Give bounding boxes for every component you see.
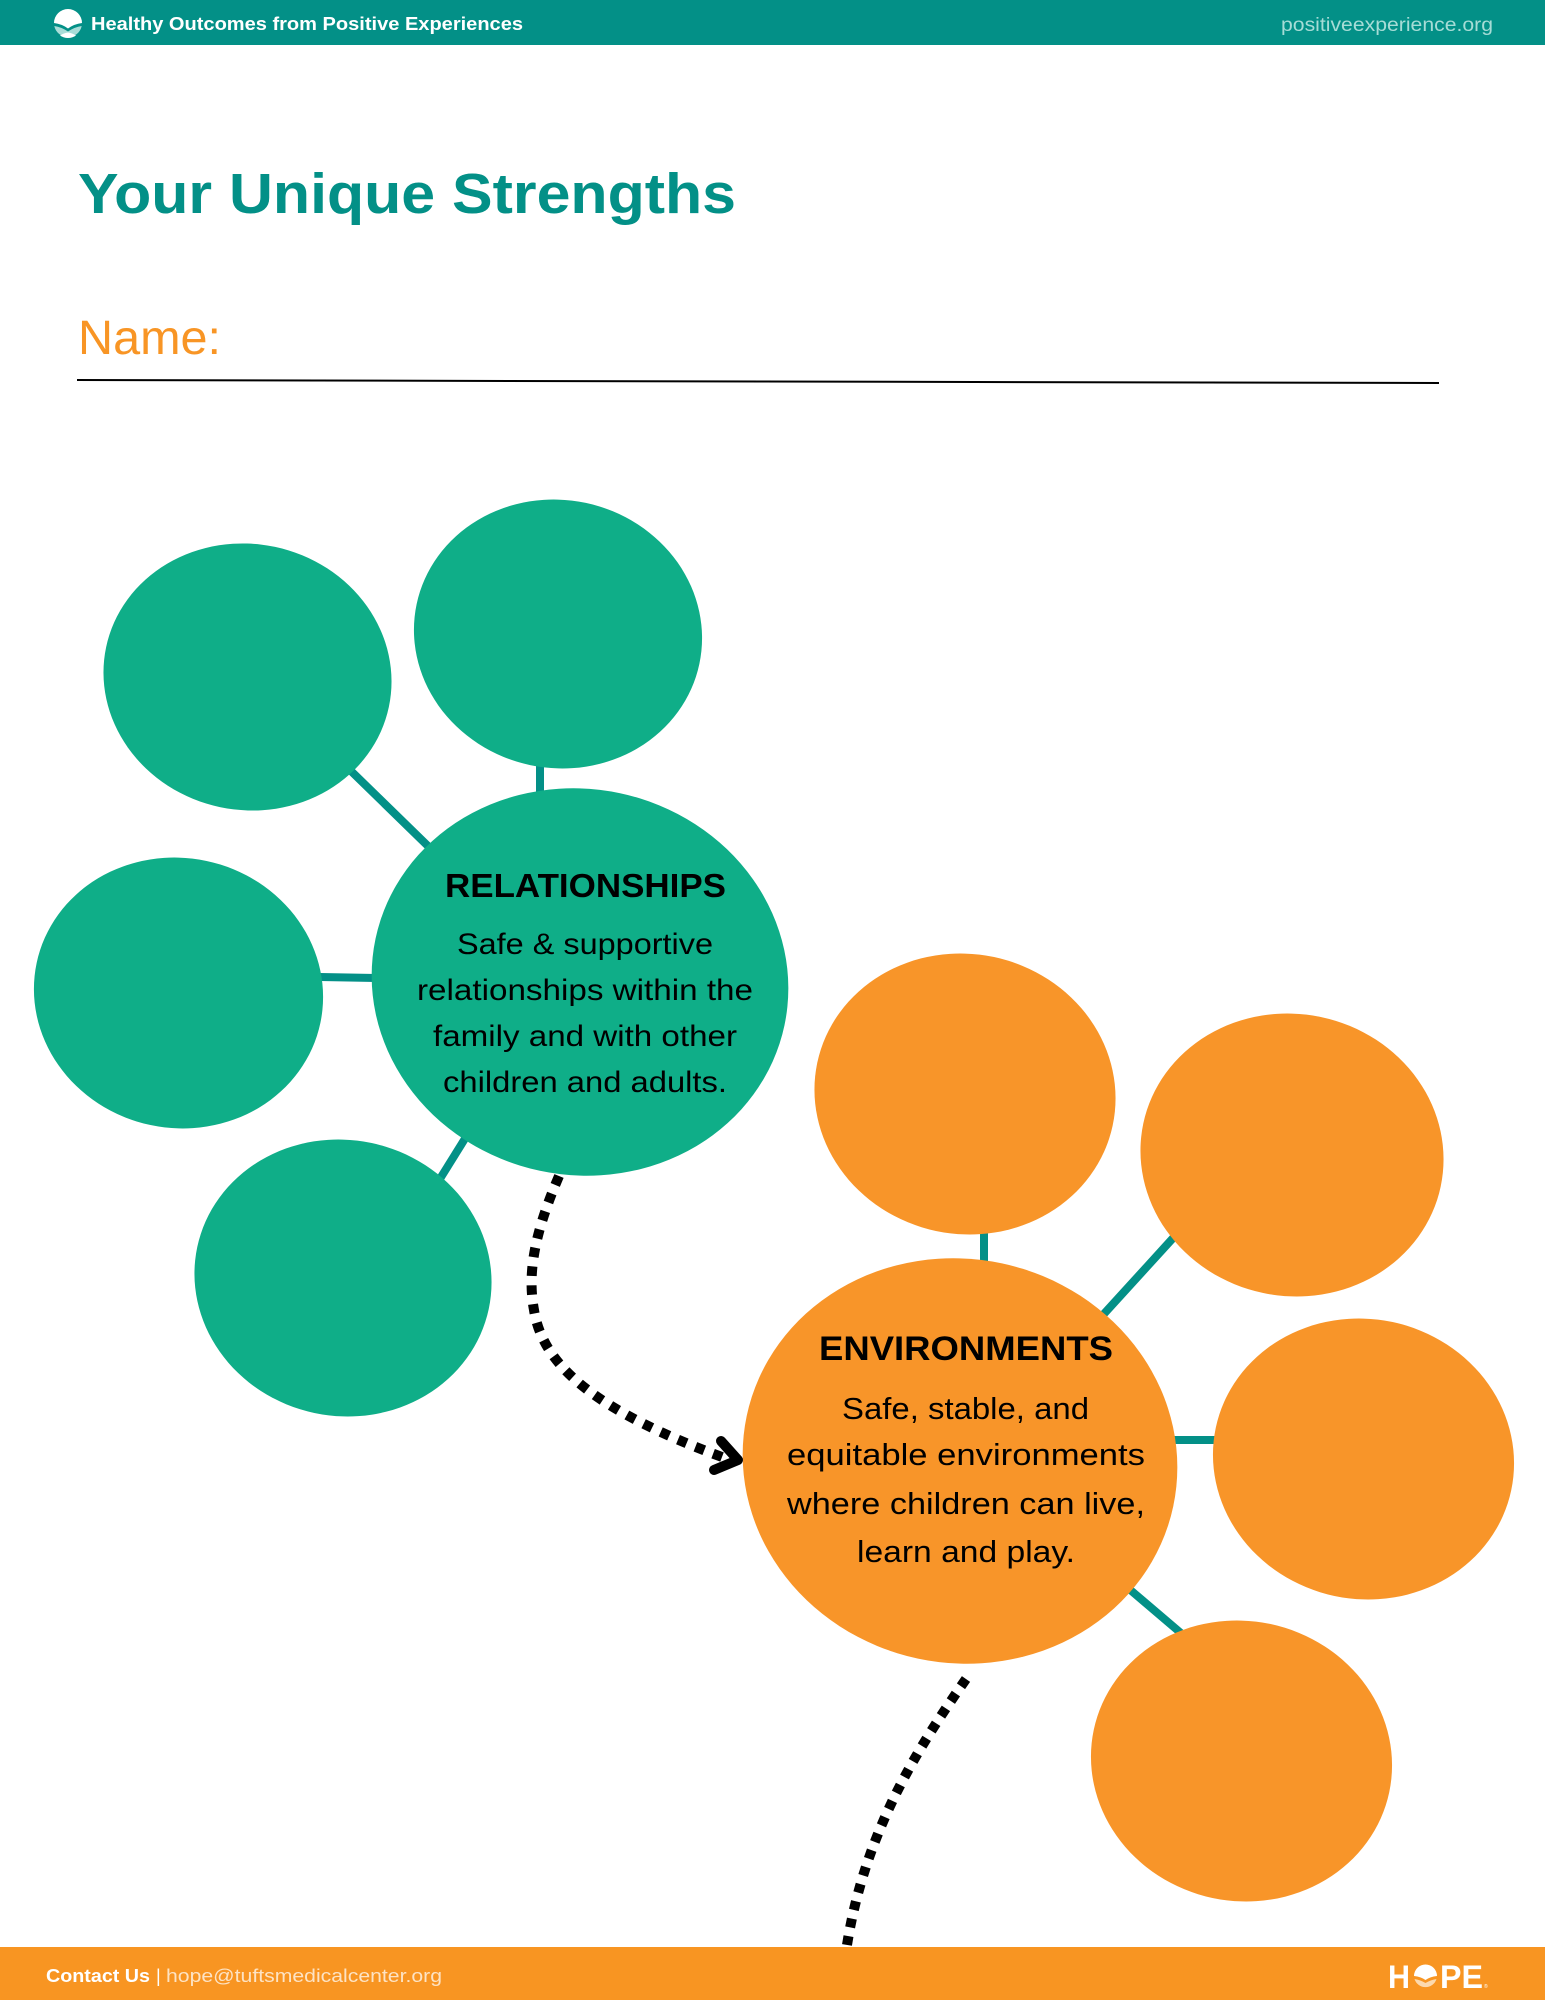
footer bar [0, 1947, 1545, 2000]
icon: HOPE logo mark [54, 9, 82, 38]
connectors: environments [984, 1232, 1216, 1634]
icon: HOPE logo: ® [1484, 1983, 1488, 1990]
connectors: relationships [320, 765, 540, 1182]
icon: HOPE logo: PE [1440, 1959, 1483, 1995]
relationships description: children and adults. [443, 1066, 727, 1099]
arrow: environments downward [847, 1679, 966, 1945]
name line [77, 380, 1439, 383]
strength circles: environments [788, 926, 1540, 1929]
name label: Name: [78, 312, 221, 365]
environments description: where children can live, [786, 1486, 1145, 1521]
panel: relationships [335, 750, 825, 1214]
footer contact: | [156, 1966, 161, 1986]
relationships heading: RELATIONSHIPS [445, 867, 726, 904]
environments description: learn and play. [857, 1534, 1075, 1569]
icon: HOPE logo [1388, 1959, 1488, 1995]
environments heading: ENVIRONMENTS [819, 1330, 1113, 1368]
footer contact [46, 1966, 442, 1986]
environments description: Safe, stable, and [842, 1391, 1089, 1426]
icon: HOPE logo: H [1388, 1959, 1410, 1995]
header website: positiveexperience.org [1281, 15, 1493, 36]
relationships description: relationships within the [417, 974, 753, 1007]
panel: environments [705, 1218, 1215, 1704]
relationships description: Safe & supportive [457, 928, 713, 961]
header title: Healthy Outcomes from Positive Experiences [91, 13, 523, 34]
footer contact: hope@tuftsmedicalcenter.org [166, 1966, 442, 1986]
header bar [0, 0, 1545, 45]
relationships description: family and with other [433, 1020, 737, 1053]
footer contact: Contact Us [46, 1966, 150, 1986]
environments description [786, 1391, 1145, 1569]
environments description: equitable environments [787, 1437, 1145, 1472]
strength circles: relationships [9, 473, 727, 1444]
title: Your Unique Strengths [78, 162, 736, 226]
relationships description [417, 928, 753, 1099]
arrow: relationships to environments [532, 1176, 738, 1470]
